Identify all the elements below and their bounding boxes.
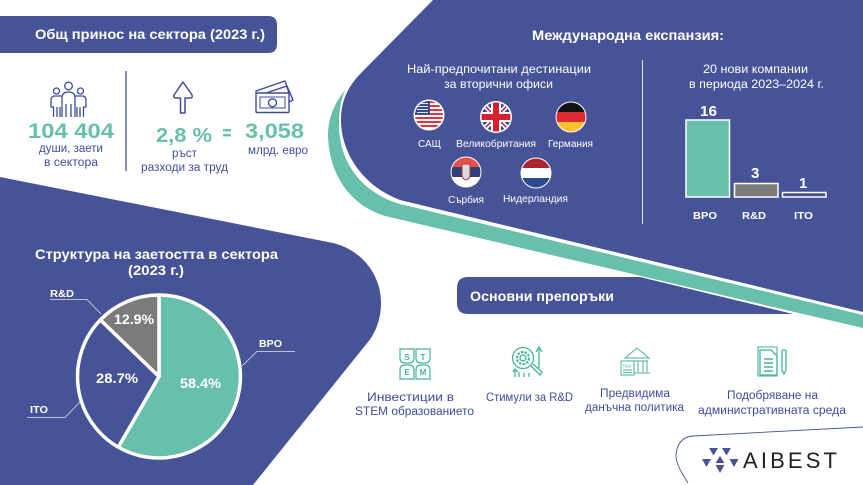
pie label: R&D xyxy=(50,288,101,314)
heading: employment structure: Структура на заетостта в сектора xyxy=(35,246,278,262)
heading: international expansion: Международна експанзия: xyxy=(532,27,724,43)
text: new companies: 20 нови компании xyxy=(703,64,808,76)
pie chart: employment structure: 28.7% xyxy=(96,370,139,386)
icon: tax building xyxy=(621,348,650,375)
icon: documents and pen xyxy=(758,347,786,376)
pie label: ITO xyxy=(27,402,80,418)
equals sign xyxy=(223,129,231,136)
stat: labor cost growth xyxy=(141,125,228,174)
heading: key recommendations: Основни препоръки xyxy=(470,288,614,304)
heading: employment structure: (2023 г.) xyxy=(128,262,184,278)
icon: STEM: M xyxy=(420,368,427,377)
bar chart: new companies: R&D xyxy=(742,210,766,222)
panel: employment structure background xyxy=(0,177,381,485)
stat: billions: млрд. евро xyxy=(248,145,308,157)
pie chart: employment structure xyxy=(27,288,295,458)
text: tax policy: Предвидима xyxy=(600,388,671,400)
icon: STEM: S xyxy=(404,353,410,362)
text: administrative environment: Подобряване на xyxy=(727,390,819,402)
text: tax policy xyxy=(585,388,685,414)
pie label: ITO: ITO xyxy=(30,404,48,416)
text: STEM investment: STEM образованието xyxy=(355,406,474,418)
icon: STEM: T xyxy=(421,353,426,362)
icon: banknotes xyxy=(256,81,293,112)
stat: employees xyxy=(28,120,114,169)
bar chart: new companies xyxy=(686,103,826,222)
country labels: Сърбия xyxy=(448,194,484,206)
text: preferred destinations: Най-предпочитани дестинации xyxy=(407,62,591,76)
country labels: САЩ xyxy=(418,138,441,150)
text: R&D incentives: Стимули за R&D xyxy=(486,392,573,404)
heading: employment structure xyxy=(35,246,278,278)
bar chart: new companies: BPO xyxy=(693,210,717,222)
bar chart: new companies: ITO xyxy=(794,210,813,222)
pie chart: employment structure: 58.4% xyxy=(180,375,222,391)
logo: AIBEST xyxy=(702,448,837,473)
text: preferred destinations xyxy=(407,62,591,91)
text: new companies: в периода 2023–2024 г. xyxy=(689,79,824,91)
country labels: Нидерландия xyxy=(503,193,568,205)
stat: labor cost growth: разходи за труд xyxy=(141,162,228,174)
panel: international expansion background xyxy=(341,0,863,312)
stat: employees: 104 404 xyxy=(28,120,114,143)
stat: billions: 3,058 xyxy=(245,120,304,143)
icon: STEM: E xyxy=(404,368,410,377)
bar chart: new companies: 16 xyxy=(700,103,717,120)
country labels: Германия xyxy=(548,138,593,150)
flag: Germany xyxy=(556,102,586,132)
icon: STEM xyxy=(400,349,430,379)
icon: R&D gear and magnifier xyxy=(512,347,542,377)
pie label: BPO xyxy=(242,338,295,366)
heading: key recommendations xyxy=(457,277,793,314)
heading: total contribution xyxy=(0,16,277,53)
pie label: R&D: R&D xyxy=(50,288,74,300)
decorative teal swoosh xyxy=(328,90,863,328)
pie label: BPO: BPO xyxy=(259,338,282,350)
logo outline xyxy=(676,427,863,483)
stat: labor cost growth: 2,8 % xyxy=(156,125,212,147)
text: tax policy: данъчна политика xyxy=(585,402,685,414)
country labels: Великобритания xyxy=(456,138,536,150)
icon: people xyxy=(51,82,86,117)
flag: Netherlands xyxy=(520,158,552,188)
icon: up arrow xyxy=(174,82,192,113)
stat: employees: души, заети xyxy=(39,143,103,155)
bar chart: new companies: 1 xyxy=(799,175,807,192)
text: STEM investment: Инвестиции в xyxy=(367,392,454,404)
icon: tax building: TAX xyxy=(622,364,631,368)
pie chart: employment structure: 12.9% xyxy=(114,311,155,327)
stat: employees: в сектора xyxy=(44,157,99,169)
text: new companies xyxy=(689,64,824,91)
text: STEM investment xyxy=(355,392,474,418)
stat: labor cost growth: ръст xyxy=(172,148,198,160)
text: administrative environment xyxy=(698,390,847,417)
bar chart: new companies: 3 xyxy=(751,165,759,182)
flag: UK xyxy=(480,101,512,133)
country labels xyxy=(418,138,593,206)
stat: billions xyxy=(245,120,308,157)
flag: Serbia xyxy=(450,156,482,188)
text: administrative environment: административната среда xyxy=(698,405,847,417)
logo: AIBEST: AIBEST xyxy=(743,448,837,473)
heading: total contribution: Общ принос на сектора (2023 г.) xyxy=(35,26,265,42)
text: preferred destinations: за вторични офиси xyxy=(444,77,553,91)
flag: USA xyxy=(414,100,444,130)
